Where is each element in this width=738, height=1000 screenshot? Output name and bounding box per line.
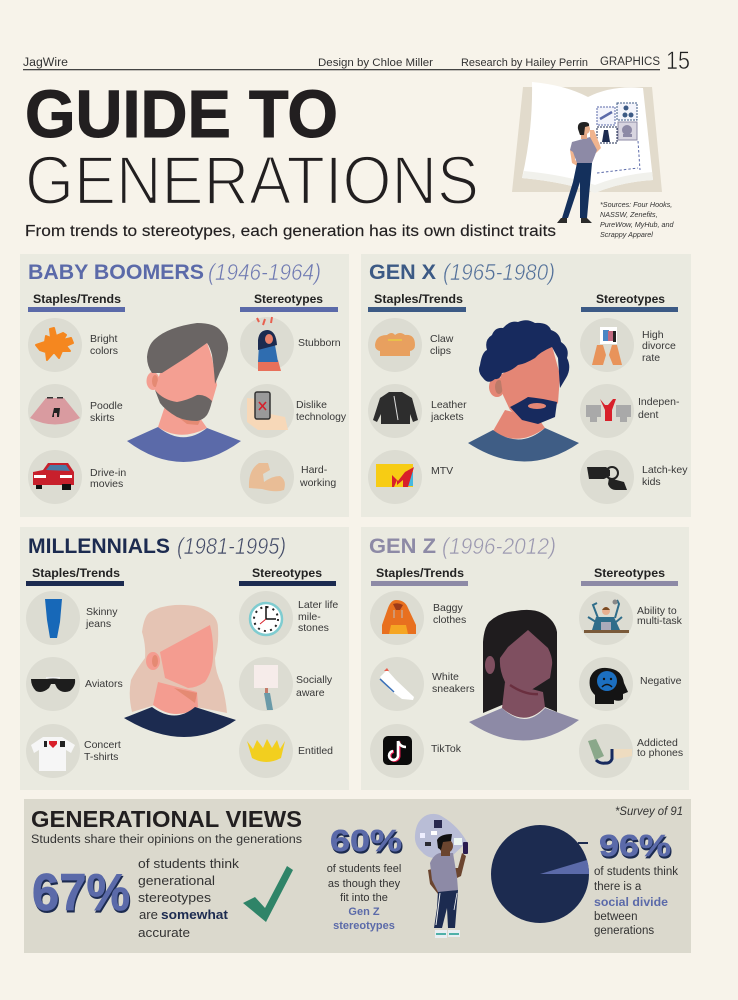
item: baggy clothes: Baggy xyxy=(433,602,464,614)
stat: 60 percent: 60% xyxy=(331,825,403,860)
item: ability to multi-task: multi-task xyxy=(637,615,683,627)
item: leather jackets xyxy=(368,384,467,438)
item: aviators: Aviators xyxy=(85,678,123,690)
item: white sneakers: White xyxy=(432,671,459,683)
item: mtv logo: MTV xyxy=(431,465,453,477)
heading: gen x: (1965-1980) xyxy=(443,259,555,285)
panel: millennials xyxy=(20,527,349,790)
page header xyxy=(23,47,690,75)
item: tiktok logo xyxy=(370,724,462,778)
pie chart: 96 percent xyxy=(491,825,589,923)
heading: gen z: (1996-2012) xyxy=(442,533,556,559)
item: stubborn: Stubborn xyxy=(298,337,341,349)
item: addicted to phones: Addicted xyxy=(637,737,678,749)
item: negative: Negative xyxy=(640,675,682,687)
item: ability to multi-task xyxy=(579,591,683,645)
stat: 96 percent: generations xyxy=(594,925,654,937)
item: socially aware xyxy=(239,657,333,711)
item: claw clips: Claw xyxy=(430,333,454,345)
item: addicted to phones: to phones xyxy=(637,747,683,759)
stat: 60 percent: stereotypes xyxy=(333,920,395,932)
panel: gen z xyxy=(361,527,689,790)
sources note: Scrappy Apparel xyxy=(600,230,653,239)
item: high divorce rate: High xyxy=(642,329,664,341)
portrait: millennial woman xyxy=(124,605,236,737)
stat: 60 percent xyxy=(327,823,403,932)
staples heading: Staples/Trends xyxy=(374,294,463,306)
item: stubborn xyxy=(240,317,341,371)
staples heading xyxy=(26,568,124,586)
staples heading: Staples/Trends xyxy=(32,568,120,580)
item: dislike technology xyxy=(240,384,347,438)
icon: check mark xyxy=(243,866,293,922)
page header: Design by Chloe Miller xyxy=(318,57,433,69)
item: white sneakers: sneakers xyxy=(432,683,475,695)
stat: 60 percent: as though they xyxy=(328,878,401,890)
stereotypes heading xyxy=(239,568,336,586)
staples heading: Staples/Trends xyxy=(33,294,121,306)
stat: 67 percent: 67% xyxy=(32,864,130,922)
item: later life milestones: stones xyxy=(298,622,329,634)
heading: gen x xyxy=(369,259,555,285)
item: later life milestones xyxy=(239,591,338,645)
portrait: gen x man xyxy=(468,320,579,462)
item: concert t-shirts xyxy=(26,724,121,778)
page header: JagWire xyxy=(23,57,68,69)
page header: GRAPHICS xyxy=(600,56,660,68)
item: high divorce rate: rate xyxy=(642,352,660,364)
item: dislike technology: technology xyxy=(296,411,347,423)
stereotypes heading: Stereotypes xyxy=(596,294,665,306)
portrait: baby boomer man xyxy=(127,323,241,462)
item: high divorce rate: divorce xyxy=(642,340,676,352)
staples heading xyxy=(28,294,125,312)
panel: generational views xyxy=(24,799,691,953)
panel: gen x xyxy=(361,254,691,517)
sources note: PureWow, MyHub, and xyxy=(600,220,675,229)
item: latch-key kids xyxy=(580,450,688,504)
item: latch-key kids: Latch-key xyxy=(642,464,688,476)
stat: 96 percent: there is a xyxy=(594,881,642,893)
item: concert t-shirts: T-shirts xyxy=(84,751,118,763)
subtitle: From trends to stereotypes, each generation has its own distinct traits xyxy=(25,223,556,240)
sources note: NASSW, Zenefits, xyxy=(600,210,658,219)
item: claw clips xyxy=(368,318,454,372)
item: ability to multi-task: Ability to xyxy=(637,605,677,617)
stat: 96 percent: of students think xyxy=(594,866,678,878)
item: baggy clothes: clothes xyxy=(433,614,466,626)
stat: 96 percent xyxy=(594,828,678,937)
stat: 67 percent: generational xyxy=(138,873,215,888)
item: hard-working: Hard- xyxy=(301,464,328,476)
title: GUIDE TO xyxy=(25,77,338,152)
item: concert t-shirts: Concert xyxy=(84,739,121,751)
item: independent xyxy=(580,384,680,438)
item: drive-in movies: movies xyxy=(90,478,123,490)
title: GENERATIONS xyxy=(25,142,479,219)
item: skinny jeans: Skinny xyxy=(86,606,118,618)
heading: millennials: (1981-1995) xyxy=(177,533,286,559)
stereotypes heading xyxy=(240,294,338,312)
stat: 60 percent: Gen Z xyxy=(348,906,380,918)
item: socially aware: Socially xyxy=(296,674,333,686)
item: later life milestones: mile- xyxy=(298,611,321,623)
item: bright colors: Bright xyxy=(90,333,118,345)
item: drive-in movies xyxy=(28,450,126,504)
item: high divorce rate xyxy=(580,318,676,372)
title xyxy=(25,77,479,219)
stereotypes heading xyxy=(581,568,678,586)
stat: 96 percent: 96% xyxy=(600,830,672,865)
item: poodle skirts: Poodle xyxy=(90,400,123,412)
item: hard-working: working xyxy=(299,477,336,489)
item: independent: Indepen- xyxy=(638,396,680,408)
item: dislike technology: Dislike xyxy=(296,399,327,411)
stat: 60 percent: 60% xyxy=(330,823,402,858)
item: bright colors: colors xyxy=(90,345,118,357)
illustration: person reading a large book xyxy=(512,82,662,223)
portrait: gen z woman xyxy=(469,610,579,741)
heading: millennials: MILLENNIALS xyxy=(28,535,170,558)
page header: 15 xyxy=(666,47,690,75)
heading: generational views: GENERATIONAL VIEWS xyxy=(31,806,302,832)
item: independent: dent xyxy=(638,409,659,421)
stat: 67 percent: stereotypes xyxy=(138,890,212,905)
staples heading xyxy=(368,294,466,312)
stereotypes heading: Stereotypes xyxy=(594,568,665,580)
sources note: *Sources: Four Hooks, xyxy=(600,200,672,209)
stat: 67 percent xyxy=(32,856,240,940)
item: poodle skirts: skirts xyxy=(90,412,114,424)
stat: 60 percent: fit into the xyxy=(340,892,388,904)
heading: baby boomers xyxy=(28,259,321,285)
stat: 96 percent: social divide xyxy=(594,897,668,909)
item: latch-key kids: kids xyxy=(642,476,661,488)
heading: gen x: GEN X xyxy=(369,261,436,284)
heading: baby boomers: BABY BOOMERS xyxy=(28,261,204,284)
heading: gen z xyxy=(369,533,556,559)
item: drive-in movies: Drive-in xyxy=(90,467,126,479)
stereotypes heading: Stereotypes xyxy=(252,568,322,580)
stereotypes heading xyxy=(581,294,678,312)
survey note: *Survey of 91 xyxy=(615,804,683,818)
panel: baby boomers xyxy=(20,254,349,517)
item: bright colors xyxy=(28,318,118,372)
item: leather jackets: Leather xyxy=(431,399,467,411)
stat: 96 percent: 96% xyxy=(599,828,671,863)
heading: millennials xyxy=(28,533,286,559)
stat: 96 percent: between xyxy=(594,911,637,923)
stereotypes heading: Stereotypes xyxy=(254,294,323,306)
item: white sneakers xyxy=(370,657,475,711)
heading: gen z: GEN Z xyxy=(369,535,436,558)
item: socially aware: aware xyxy=(296,687,325,699)
staples heading: Staples/Trends xyxy=(376,568,464,580)
item: claw clips: clips xyxy=(430,345,451,357)
item: poodle skirts xyxy=(28,384,123,438)
sources note xyxy=(600,200,675,239)
page header: Research by Hailey Perrin xyxy=(461,57,588,69)
heading: baby boomers: (1946-1964) xyxy=(208,259,321,285)
item: leather jackets: jackets xyxy=(430,411,464,423)
item: baggy clothes xyxy=(370,591,466,645)
stat: 67 percent: of students think xyxy=(138,856,240,871)
item: skinny jeans: jeans xyxy=(85,618,111,630)
item: later life milestones: Later life xyxy=(298,599,338,611)
item: entitled crown: Entitled xyxy=(298,745,333,757)
illustration: student on phone xyxy=(415,814,468,938)
item: entitled crown xyxy=(239,724,333,778)
item: mtv logo xyxy=(368,450,453,504)
stat: 67 percent: accurate xyxy=(138,925,190,940)
item: aviators xyxy=(26,657,123,711)
item: hard-working xyxy=(240,450,336,504)
stat: 60 percent: of students feel xyxy=(327,863,401,875)
item: tiktok logo: TikTok xyxy=(431,743,462,755)
stat: 67 percent: 67% xyxy=(33,866,131,924)
item: negative xyxy=(579,657,682,711)
staples heading xyxy=(371,568,468,586)
subheading: Students share their opinions on the generations xyxy=(31,834,302,846)
stat: 67 percent: are xyxy=(139,907,158,922)
stat: 67 percent: somewhat xyxy=(161,907,229,922)
item: addicted to phones xyxy=(579,724,683,778)
item: skinny jeans xyxy=(26,591,118,645)
